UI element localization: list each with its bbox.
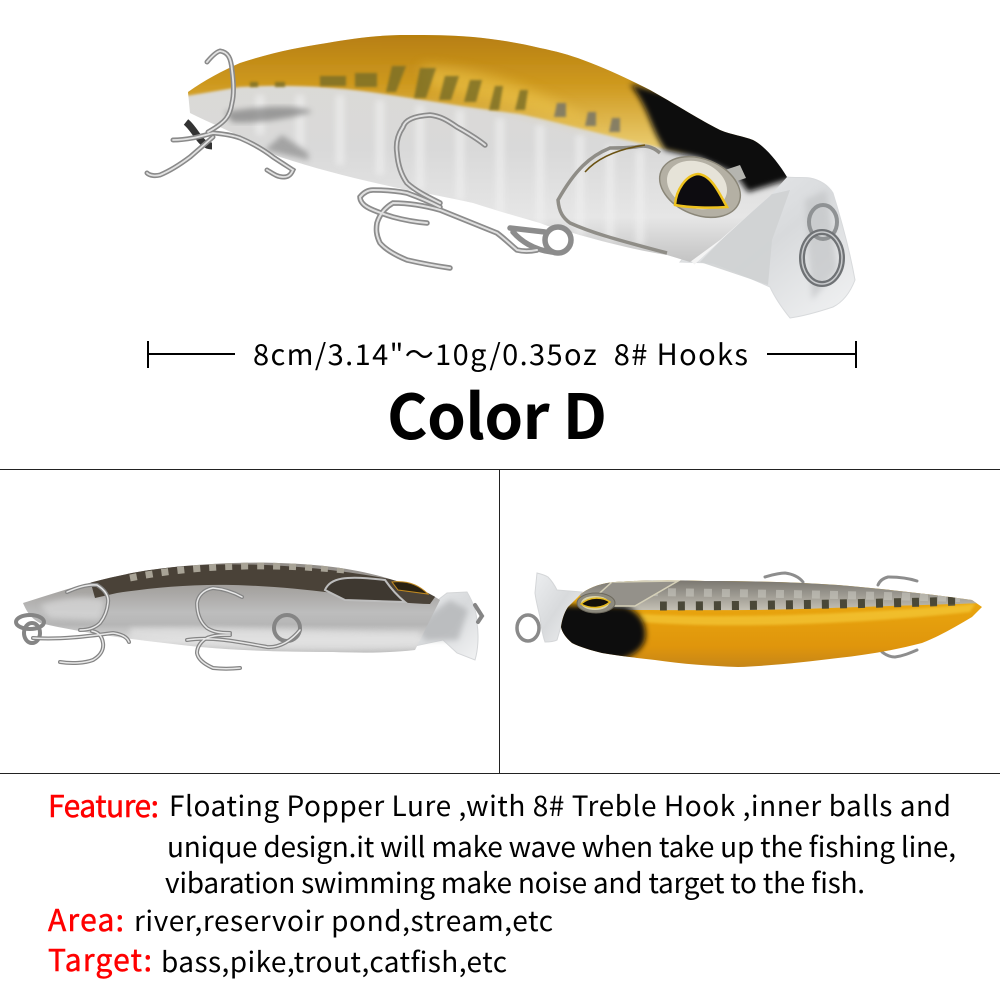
- target label: Target:: [48, 936, 152, 980]
- panel frame lines: [0, 469, 1000, 774]
- main lure eye: [651, 145, 749, 229]
- main lure clear popper lip: [680, 177, 855, 318]
- main lure body: [188, 35, 787, 262]
- left lure back scale pattern: [130, 566, 345, 578]
- feature text line 2: unique design.it will make wave when take up the fishing line,: [167, 826, 956, 866]
- left lure eye: [392, 582, 428, 594]
- main lure dark back marks: [250, 66, 620, 132]
- main lure photo: [147, 20, 855, 318]
- spec line: 8cm/3.14"～10g/0.35oz 8# Hooks: [253, 332, 748, 374]
- right lure black head: [555, 605, 646, 660]
- main lure gold back: [188, 35, 760, 153]
- main lure scale bands: [260, 95, 640, 245]
- left lure hooks: [16, 585, 482, 669]
- left lure head plate: [325, 578, 405, 602]
- target text: bass,pike,trout,catfish,etc: [161, 941, 507, 981]
- right lure head plate: [592, 581, 678, 606]
- right lure hook tips: [765, 573, 917, 657]
- main lure nose ring: [802, 205, 842, 284]
- main lure gill plate: [558, 146, 667, 253]
- right lure nose ring: [517, 615, 539, 641]
- dimension line right: [767, 341, 856, 368]
- main lure tail treble hook: [147, 51, 293, 177]
- dimension line left: [148, 341, 235, 368]
- right lure body: [561, 580, 982, 667]
- right lure gold highlight: [640, 604, 975, 625]
- feature label: Feature:: [48, 782, 159, 826]
- main lure tail ring behind body: [186, 122, 212, 146]
- right lure silver back: [580, 580, 977, 610]
- feature text line 1: Floating Popper Lure ,with 8# Treble Hook ,inner balls and: [169, 785, 951, 825]
- feature text line 3: vibaration swimming make noise and target to the fish.: [165, 862, 865, 902]
- area label: Area:: [48, 896, 124, 940]
- main lure belly treble hook: [360, 115, 571, 268]
- main lure black head: [630, 84, 800, 192]
- left lure dark back band: [90, 564, 440, 604]
- right lure clear lip: [535, 573, 582, 642]
- title: Color D: [387, 367, 607, 457]
- right lure eye: [577, 593, 615, 613]
- right lure back dark teeth: [660, 601, 965, 606]
- right side lure photo: [517, 573, 985, 670]
- main lure side shading: [225, 107, 312, 123]
- left lure body: [20, 560, 445, 655]
- left lure clear lip: [408, 592, 478, 660]
- left side lure photo: [16, 560, 482, 669]
- area text: river,reservoir pond,stream,etc: [134, 900, 553, 940]
